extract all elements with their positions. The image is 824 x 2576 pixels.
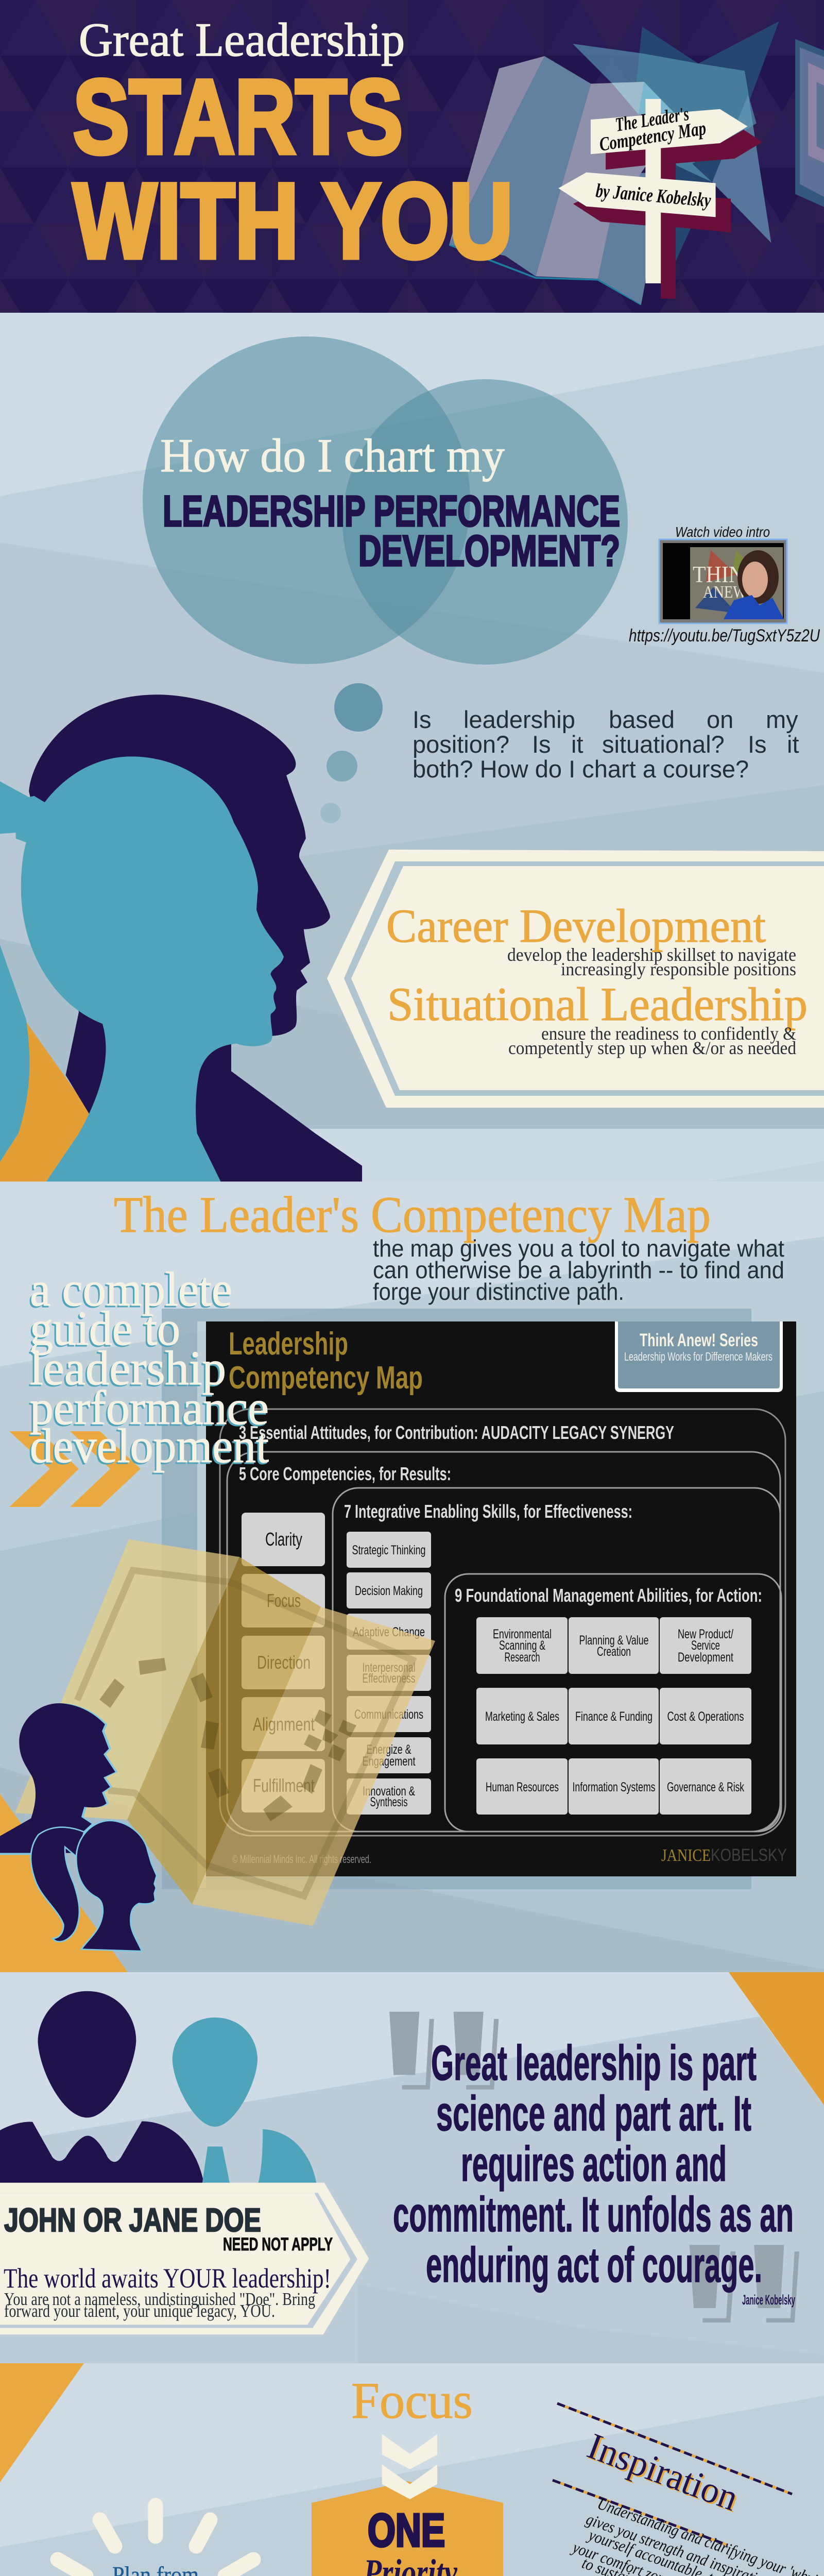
text: career development description: develop the leadership skillset to navigate xyxy=(507,944,796,965)
panel: map section background xyxy=(0,1129,824,1972)
one priority hexagon: ONE xyxy=(368,2505,445,2556)
text: career development description: increasingly responsible positions xyxy=(561,959,796,979)
illustration: orange corner xyxy=(0,1794,128,1972)
text: leadership question: Is xyxy=(748,731,767,758)
text: the map description xyxy=(373,1235,784,1305)
chart: leadership competency map xyxy=(206,1321,796,1876)
integrative skill buttons: Synthesis xyxy=(370,1795,408,1809)
heading: a complete guide: guide to xyxy=(30,1302,180,1355)
integrative skill buttons: Energize & xyxy=(367,1742,411,1757)
text: the map description: forge your distinctive path. xyxy=(373,1278,624,1305)
video intro thumbnail xyxy=(629,524,820,646)
integrative skill buttons: Effectiveness xyxy=(363,1671,415,1686)
text: John or Jane Doe callout: NEED NOT APPLY xyxy=(223,2234,333,2255)
video intro thumbnail: ANEW xyxy=(703,583,747,602)
heading: Focus: Focus xyxy=(351,2372,473,2429)
heading: leadership performance development xyxy=(163,487,620,575)
text: situational leadership description xyxy=(508,1023,796,1058)
core competency buttons: Alignment xyxy=(253,1714,315,1735)
one priority hexagon xyxy=(312,2434,503,2576)
core competency buttons: Clarity xyxy=(265,1529,302,1550)
text: John or Jane Doe callout: forward your talent, your unique legacy, YOU. xyxy=(4,2301,275,2321)
core competency buttons: Focus xyxy=(267,1590,301,1611)
core competency buttons xyxy=(242,1513,325,1812)
integrative skill buttons: Adaptive Change xyxy=(353,1625,425,1639)
foundational ability buttons: Development xyxy=(678,1650,733,1665)
callout: career development and situational leadership xyxy=(327,850,824,1108)
illustration: man and woman silhouettes xyxy=(0,1703,157,1951)
foundational ability buttons: Research xyxy=(505,1650,540,1665)
foundational ability buttons: Creation xyxy=(597,1645,631,1659)
text: leadership question: Is xyxy=(413,706,432,733)
foundational ability buttons xyxy=(476,1617,751,1815)
icon: signpost: Competency Map xyxy=(598,117,708,156)
series badge xyxy=(615,1321,783,1392)
heading: a complete guide: a complete xyxy=(30,1263,232,1316)
foundational ability buttons: Scanning & xyxy=(499,1638,545,1653)
map title: Competency Map xyxy=(229,1360,423,1396)
frame headings xyxy=(239,1422,762,1606)
heading: STARTS: STARTS xyxy=(73,58,403,176)
text: leadership question: my xyxy=(766,706,798,733)
text: John or Jane Doe callout: The world awaits YOUR leadership! xyxy=(4,2263,331,2294)
icon: signpost: The Leader's xyxy=(614,103,691,136)
text: leadership question: Is xyxy=(532,731,551,758)
heading: leadership performance development: LEADERSHIP PERFORMANCE xyxy=(163,487,620,535)
map footer: © Millennial Minds Inc. All rights reserved. xyxy=(232,1853,371,1866)
integrative skill buttons: Innovation & xyxy=(363,1784,415,1799)
heading: a complete guide xyxy=(28,1263,269,1475)
text: leadership question: it xyxy=(787,731,799,758)
map footer: KOBELSKY xyxy=(711,1845,787,1865)
text: leadership question: position? xyxy=(413,731,509,758)
heading: Inspiration: Inspiration xyxy=(583,2427,745,2520)
illustration: two people xyxy=(0,1991,369,2334)
text: leadership question: situational? xyxy=(602,731,725,758)
illustration: translucent folded map xyxy=(15,1539,435,1926)
panel: John or Jane Doe and quote xyxy=(0,1972,824,2363)
heading: The Leader's Competency Map: The Leader's Competency Map xyxy=(114,1186,711,1243)
text: John or Jane Doe callout: JOHN OR JANE DOE xyxy=(4,2201,261,2239)
foundational ability buttons: Planning & Value xyxy=(579,1633,649,1648)
video intro thumbnail: THIN xyxy=(693,561,744,587)
core competency buttons: Fulfillment xyxy=(253,1775,315,1796)
quote text xyxy=(393,2036,794,2293)
foundational ability buttons: Cost & Operations xyxy=(667,1709,744,1724)
nested frames xyxy=(220,1409,785,1836)
map title xyxy=(229,1326,423,1396)
text: leadership question: it xyxy=(571,731,583,758)
foundational ability buttons: Marketing & Sales xyxy=(485,1709,559,1724)
text: situational leadership description: competently step up when &/or as needed xyxy=(508,1038,796,1058)
integrative skill buttons: Strategic Thinking xyxy=(352,1543,425,1557)
heading: WITH YOU: WITH YOU xyxy=(73,161,513,280)
heading: a complete guide: performance xyxy=(28,1383,267,1436)
map footer: JANICE xyxy=(661,1846,711,1865)
integrative skill buttons xyxy=(347,1532,431,1815)
map title: Leadership xyxy=(229,1326,348,1362)
thought bubbles xyxy=(320,683,383,823)
heading: Great Leadership: Great Leadership xyxy=(79,13,405,66)
foundational ability buttons: New Product/ xyxy=(678,1627,733,1641)
text: leadership question: on xyxy=(707,706,733,733)
icon: chevrons xyxy=(9,1431,141,1507)
heading: Inspiration: Inspiration xyxy=(582,2425,744,2519)
venn circles xyxy=(143,336,628,665)
heading: situational leadership: Situational Leadership xyxy=(387,978,808,1030)
heading: a complete guide: development xyxy=(28,1421,267,1475)
text: John or Jane Doe callout: You are not a nameless, undistinguished "Doe". Bring xyxy=(4,2289,315,2309)
map footer xyxy=(232,1845,787,1866)
foundational ability buttons: Governance & Risk xyxy=(667,1780,744,1794)
video intro thumbnail: Watch video intro xyxy=(675,524,770,540)
integrative skill buttons: Engagement xyxy=(363,1754,416,1769)
text: the map description: can otherwise be a labyrinth -- to find and xyxy=(373,1257,784,1283)
heading: a complete guide: guide to xyxy=(28,1303,179,1357)
icon: sun rays plan xyxy=(43,2505,267,2576)
heading: leadership performance development: DEVELOPMENT? xyxy=(358,527,620,575)
illustration: folded map shapes xyxy=(449,21,824,304)
core competency buttons: Direction xyxy=(257,1652,311,1673)
integrative skill buttons: Communications xyxy=(354,1707,423,1722)
integrative skill buttons: Decision Making xyxy=(355,1584,423,1598)
integrative skill buttons: Interpersonal xyxy=(363,1660,415,1675)
heading: a complete guide: a complete xyxy=(28,1264,231,1318)
heading: Inspiration xyxy=(553,2403,792,2545)
text: situational leadership description: ensure the readiness to confidently & xyxy=(541,1023,796,1044)
heading: How do I chart my: How do I chart my xyxy=(160,429,505,482)
panel backing rectangle xyxy=(162,1309,751,1889)
panel: header banner xyxy=(0,0,824,313)
text: leadership question: both? How do I chart a course? xyxy=(413,755,749,783)
panel: focus section xyxy=(0,2363,824,2576)
series badge: Think Anew! Series xyxy=(640,1330,758,1350)
text: the map description: the map gives you a tool to navigate what xyxy=(373,1235,784,1262)
heading: a complete guide: performance xyxy=(30,1381,269,1435)
text: leadership question: leadership xyxy=(464,706,575,733)
foundational ability buttons: Finance & Funding xyxy=(575,1709,653,1724)
illustration: two head silhouettes xyxy=(0,694,362,1181)
foundational ability buttons: Service xyxy=(691,1638,720,1653)
icon: quotation marks xyxy=(389,2012,799,2323)
panel: how do I chart my development xyxy=(0,313,824,1132)
icon: signpost: by Janice Kobelsky xyxy=(595,180,712,211)
heading: a complete guide: development xyxy=(30,1419,269,1473)
text: career development description xyxy=(507,944,796,979)
text: leadership question: based xyxy=(609,706,675,733)
frame headings: 5 Core Competencies, for Results: xyxy=(239,1463,451,1484)
heading: career development: Career Development xyxy=(386,900,766,952)
text: John or Jane Doe callout xyxy=(4,2201,333,2321)
foundational ability buttons: Human Resources xyxy=(486,1780,559,1794)
heading: a complete guide: leadership xyxy=(28,1343,225,1397)
foundational ability buttons: Information Systems xyxy=(573,1780,655,1794)
heading: a complete guide: leadership xyxy=(30,1342,226,1395)
icon: signpost xyxy=(558,99,762,299)
frame headings: 7 Integrative Enabling Skills, for Effectiveness: xyxy=(344,1501,632,1522)
foundational ability buttons: Environmental xyxy=(493,1627,552,1641)
